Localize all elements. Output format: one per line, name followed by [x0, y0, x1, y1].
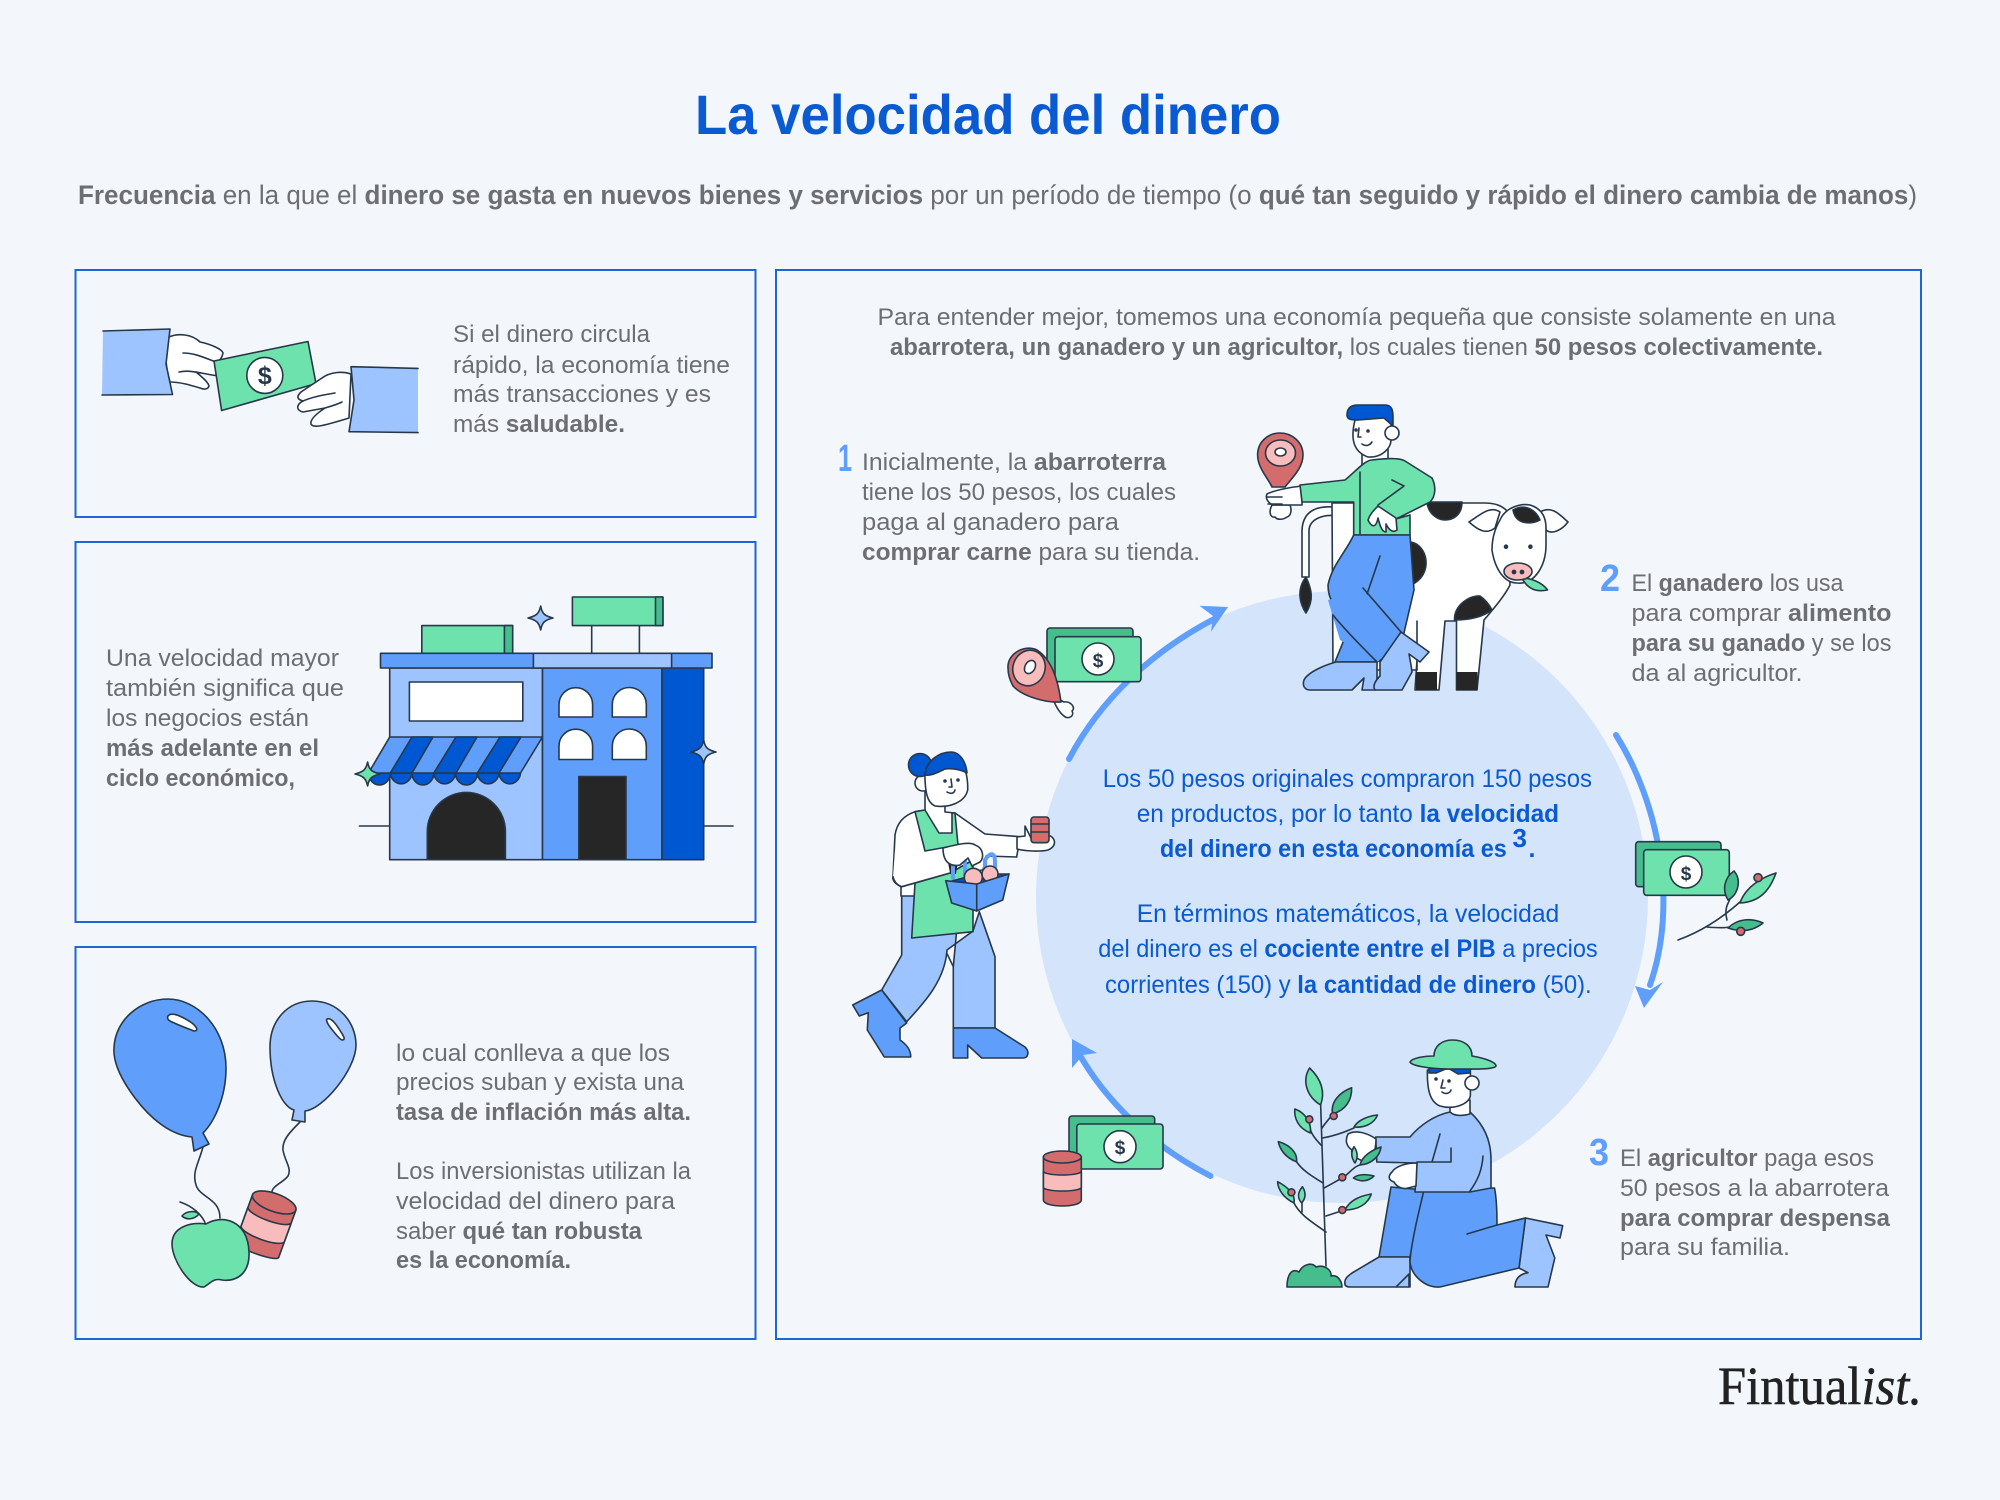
text block: inflación: Los inversionistas utilizan la — [396, 1158, 691, 1185]
step 3 text: para su familia. — [1620, 1234, 1790, 1261]
text block: inflación — [396, 1040, 691, 1274]
panel: inflación — [76, 947, 756, 1339]
subtitle: Frecuencia en la que el dinero se gasta en nuevos bienes y servicios por un período de tiempo (o qué tan seguido y rápido el dinero cambia de manos) — [78, 180, 1917, 210]
step 3 text: 3 — [1589, 1132, 1609, 1174]
intro text: abarrotera, un ganadero y un agricultor, los cuales tienen 50 pesos colectivamente. — [890, 334, 1823, 361]
agricultor — [1345, 1040, 1563, 1287]
center text: definition of velocity: . — [1528, 835, 1535, 863]
step 3 text — [1589, 1132, 1890, 1261]
intro text — [878, 304, 1836, 361]
step 2 text: para su ganado y se los — [1632, 630, 1892, 657]
text block: saludable: más saludable. — [453, 411, 625, 438]
center text: definition of velocity: corrientes (150) y la cantidad de dinero (50). — [1105, 971, 1592, 999]
center text: definition of velocity: del dinero es el cociente entre el PIB a precios — [1098, 935, 1598, 963]
icon: balloons lifting apple and can — [114, 999, 356, 1287]
step 3 text: 50 pesos a la abarrotera — [1620, 1175, 1889, 1202]
panel: ciclo económico — [76, 542, 756, 922]
step 2 text: para comprar alimento — [1632, 600, 1892, 627]
icon: money and can — [1043, 1116, 1163, 1206]
panel: ejemplo de economía — [776, 270, 1921, 1339]
center text: definition of velocity: del dinero en esta economía es — [1160, 835, 1507, 863]
step 1 text: tiene los 50 pesos, los cuales — [862, 479, 1176, 506]
text block: saludable — [453, 321, 730, 438]
icon: money and branch — [1636, 842, 1776, 940]
center text: definition of velocity: 3 — [1512, 823, 1527, 853]
step 3 text: para comprar despensa — [1620, 1205, 1890, 1232]
central circle — [1036, 591, 1648, 1203]
text block: saludable: Si el dinero circula — [453, 321, 650, 348]
step 1 text: 1 — [838, 438, 852, 480]
text block: ciclo económico: ciclo económico, — [106, 765, 295, 792]
text block: inflación: es la economía. — [396, 1247, 571, 1274]
icon: money and can: $ — [1115, 1138, 1126, 1159]
step 1 text: paga al ganadero para — [862, 509, 1119, 536]
panel: circulación rápida — [76, 270, 756, 517]
illustration: abarrotera woman — [853, 752, 1054, 1058]
illustration: agricultor with plant — [1278, 1040, 1563, 1287]
text block: inflación: velocidad del dinero para — [396, 1188, 675, 1215]
icon: money and meat: $ — [1093, 651, 1104, 672]
center text: definition of velocity: Los 50 pesos originales compraron 150 pesos — [1103, 765, 1592, 793]
step 2 text — [1600, 558, 1892, 687]
text block: ciclo económico: Una velocidad mayor — [106, 645, 339, 672]
text block: saludable: rápido, la economía tiene — [453, 352, 730, 379]
text block: inflación: saber qué tan robusta — [396, 1218, 642, 1245]
icon: hands exchanging a bill — [102, 329, 418, 433]
arrow: ganadero to agricultor — [1616, 735, 1663, 1008]
illustration: ganadero with cow — [1258, 405, 1568, 690]
step 2 text: da al agricultor. — [1632, 660, 1802, 687]
text block: ciclo económico: también significa que — [106, 675, 344, 702]
title: La velocidad del dinero — [695, 83, 1281, 146]
cow — [1300, 502, 1568, 690]
step 1 text: Inicialmente, la abarroterra — [862, 449, 1166, 476]
center text: definition of velocity: En términos matemáticos, la velocidad — [1137, 900, 1559, 928]
ganadero — [1258, 405, 1435, 690]
plant — [1278, 1068, 1378, 1287]
arrow: abarrotera to ganadero — [1069, 606, 1228, 759]
step 1 text: comprar carne para su tienda. — [862, 539, 1200, 566]
text block: ciclo económico: los negocios están — [106, 705, 309, 732]
step 1 text — [838, 438, 1200, 566]
text block: saludable: más transacciones y es — [453, 381, 711, 408]
icon: hands exchanging a bill: $ — [258, 362, 272, 390]
text block: inflación: precios suban y exista una — [396, 1069, 684, 1096]
icon: store building — [355, 597, 733, 860]
text block: inflación: tasa de inflación más alta. — [396, 1099, 691, 1126]
text block: ciclo económico: más adelante en el — [106, 735, 319, 762]
center text: definition of velocity: en productos, por lo tanto la velocidad — [1137, 800, 1559, 828]
center text: definition of velocity — [1098, 765, 1598, 999]
text block: inflación: lo cual conlleva a que los — [396, 1040, 670, 1067]
icon: money and branch: $ — [1681, 864, 1692, 885]
text block: ciclo económico — [106, 645, 344, 792]
step 2 text: El ganadero los usa — [1632, 570, 1844, 597]
intro text: Para entender mejor, tomemos una economía pequeña que consiste solamente en una — [878, 304, 1836, 331]
arrow: agricultor to abarrotera — [1072, 1039, 1210, 1176]
icon: money and meat — [1008, 628, 1141, 718]
step 3 text: El agricultor paga esos — [1620, 1145, 1874, 1172]
step 2 text: 2 — [1600, 558, 1620, 600]
logo: Fintualist: Fintualist. — [1718, 1356, 1922, 1416]
